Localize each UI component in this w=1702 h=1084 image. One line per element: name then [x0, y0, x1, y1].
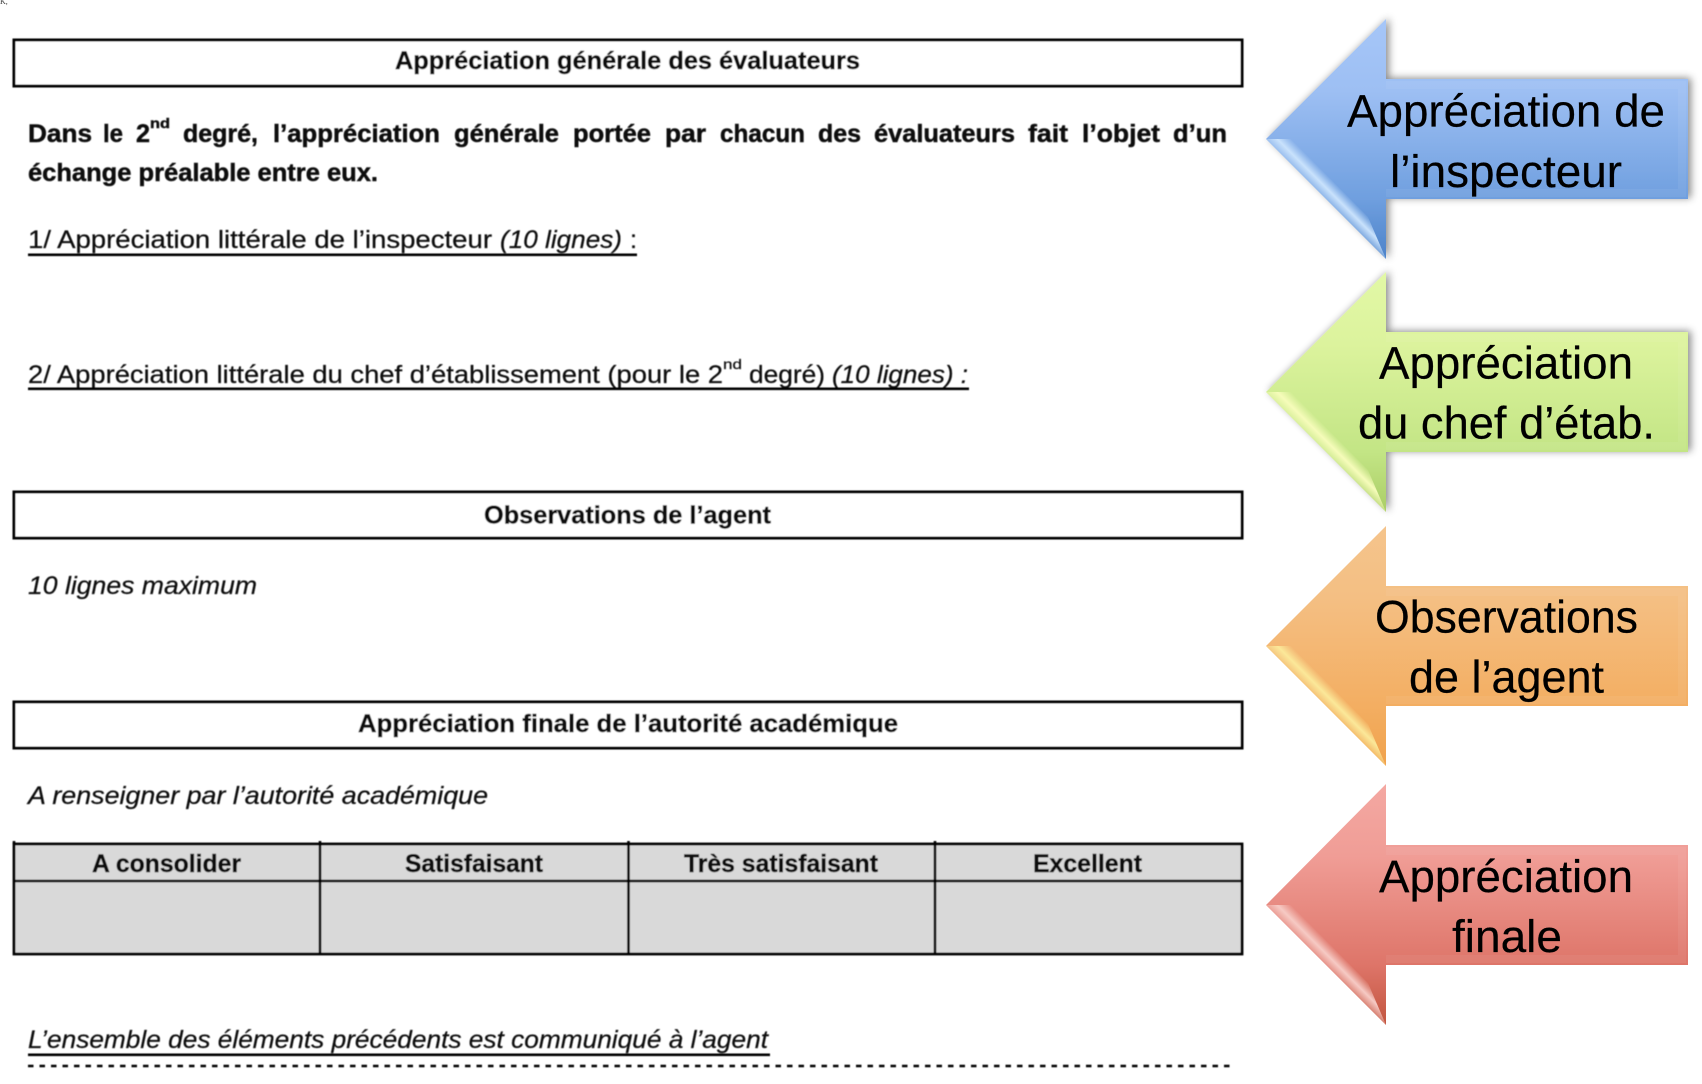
- section line 1: inspecteur: 1/ Appréciation littérale de l’inspecteur: [28, 226, 492, 254]
- section line 2: chef d'établissement: 2/ Appréciation littérale du chef d’établissement (pour le 2: [28, 361, 723, 389]
- section line 2: chef d'établissement: [28, 356, 969, 390]
- intro paragraph: évaluateurs: [874, 120, 1015, 148]
- table header: A consolider: A consolider: [92, 850, 241, 878]
- intro paragraph: le: [103, 120, 123, 148]
- arrow: Appréciation du chef d'étab.: Appréciation: [1379, 338, 1633, 388]
- intro paragraph: générale: [454, 120, 559, 148]
- arrow: Appréciation de l'inspecteur: [1266, 19, 1688, 259]
- section line 1: inspecteur: :: [630, 226, 637, 254]
- heading box: Appréciation générale des évaluateurs: [14, 40, 1242, 86]
- arrow: Appréciation finale: finale: [1452, 911, 1562, 962]
- intro paragraph: degré,: [183, 120, 258, 148]
- intro paragraph: portée: [573, 120, 651, 148]
- intro paragraph: Dans: [28, 120, 92, 148]
- arrow: Appréciation du chef d'étab.: [1266, 272, 1688, 512]
- rating table: [14, 841, 1242, 954]
- heading box: Appréciation finale: Appréciation finale de l’autorité académique: [358, 710, 898, 738]
- arrow: Appréciation de l'inspecteur: l’inspecteur: [1390, 146, 1622, 197]
- arrow: Appréciation de l'inspecteur: Appréciation de: [1347, 86, 1665, 136]
- intro paragraph: 2: [136, 120, 150, 148]
- arrow: Appréciation du chef d'étab.: du chef d’étab.: [1358, 398, 1655, 448]
- intro paragraph: échange préalable entre eux.: [28, 159, 378, 187]
- arrow: Observations de l'agent: Observations: [1375, 592, 1638, 642]
- arrow: Observations de l'agent: de l’agent: [1409, 652, 1604, 702]
- table header: Satisfaisant: Satisfaisant: [405, 850, 544, 878]
- note: 10 lignes maximum: 10 lignes maximum: [28, 572, 257, 600]
- table header: Très satisfaisant: Très satisfaisant: [684, 850, 879, 878]
- intro paragraph: [28, 115, 1227, 187]
- table header: Excellent: Excellent: [1033, 850, 1143, 878]
- heading box: Observations de l'agent: [14, 492, 1242, 538]
- heading box: Appréciation générale des évaluateurs: Appréciation générale des évaluateurs: [395, 47, 860, 75]
- document: evaluation form: [14, 40, 1242, 1066]
- arrow: Appréciation finale: Appréciation: [1379, 851, 1633, 902]
- intro paragraph: d’un: [1173, 120, 1227, 148]
- section line 1: inspecteur: (10 lignes): [500, 226, 622, 254]
- intro paragraph: fait: [1028, 120, 1069, 148]
- heading box: Appréciation finale: [14, 702, 1242, 748]
- arrow: Appréciation finale: [1266, 784, 1688, 1025]
- arrow: Observations de l'agent: [1266, 526, 1688, 766]
- closing note: L’ensemble des éléments précédents est communiqué à l’agent: [28, 1026, 769, 1054]
- intro paragraph: nd: [150, 115, 170, 131]
- section line 1: inspecteur: [28, 226, 637, 256]
- heading box: Observations de l'agent: Observations de l’agent: [484, 502, 772, 530]
- intro paragraph: chacun: [720, 120, 805, 148]
- intro paragraph: l’objet: [1082, 120, 1161, 148]
- intro paragraph: l’appréciation: [273, 120, 440, 148]
- note: A renseigner: A renseigner par l’autorité académique: [26, 782, 488, 810]
- section line 2: chef d'établissement: degré): [749, 361, 825, 389]
- section line 2: chef d'établissement: (10 lignes) :: [832, 361, 968, 389]
- intro paragraph: des: [818, 120, 861, 148]
- section line 2: chef d'établissement: nd: [723, 356, 742, 372]
- intro paragraph: par: [665, 120, 706, 148]
